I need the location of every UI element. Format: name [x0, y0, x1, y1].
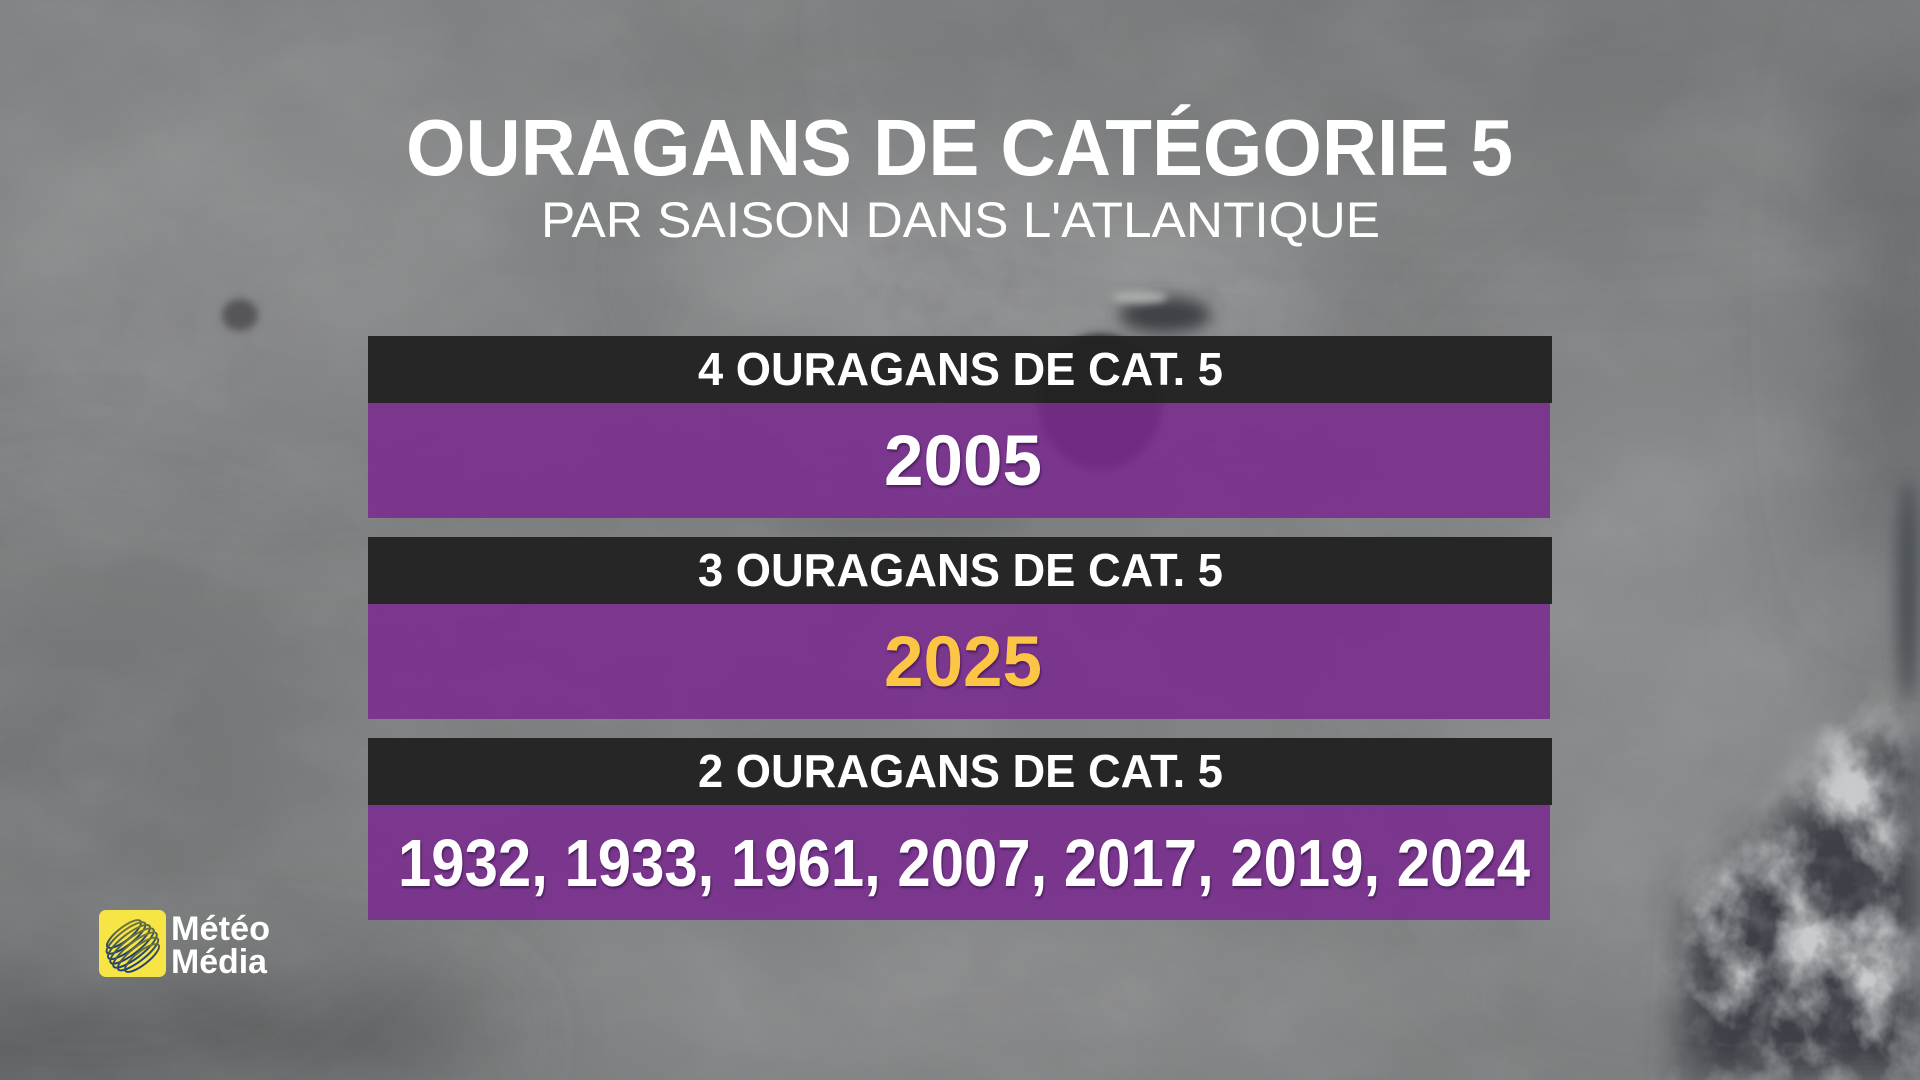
header bar: 4 hurricanes: [368, 336, 1552, 403]
header bar: 3 hurricanes: [368, 537, 1552, 604]
year bar: list of seasons: [368, 805, 1550, 920]
year bar: 2025: 2025: [884, 623, 1042, 702]
subtitle: PAR SAISON DANS L'ATLANTIQUE: [541, 192, 1380, 248]
year bar: list of seasons: 1932, 1933, 1961, 2007, 2017, 2019, 2024: [398, 826, 1530, 901]
hurricane eye: [1038, 291, 1211, 470]
panel: 3 hurricanes: [368, 537, 1552, 719]
title: OURAGANS DE CATÉGORIE 5: [406, 103, 1513, 192]
header bar: 2 hurricanes: 2 OURAGANS DE CAT. 5: [698, 745, 1223, 797]
year bar: 2005: 2005: [884, 422, 1042, 501]
year bar: 2005: [368, 403, 1550, 518]
panel: 4 hurricanes: [368, 336, 1552, 518]
header bar: 4 hurricanes: 4 OURAGANS DE CAT. 5: [698, 343, 1223, 395]
logo: MétéoMédia: Média: [171, 943, 268, 981]
icon: yellow globe: [99, 910, 166, 977]
logo: MétéoMédia: [99, 910, 270, 981]
wordmark: Météo: [171, 910, 270, 948]
header bar: 2 hurricanes: [368, 738, 1552, 805]
panel: 2 hurricanes: [368, 738, 1552, 920]
header bar: 3 hurricanes: 3 OURAGANS DE CAT. 5: [698, 544, 1223, 596]
year bar: 2025: [368, 604, 1550, 719]
